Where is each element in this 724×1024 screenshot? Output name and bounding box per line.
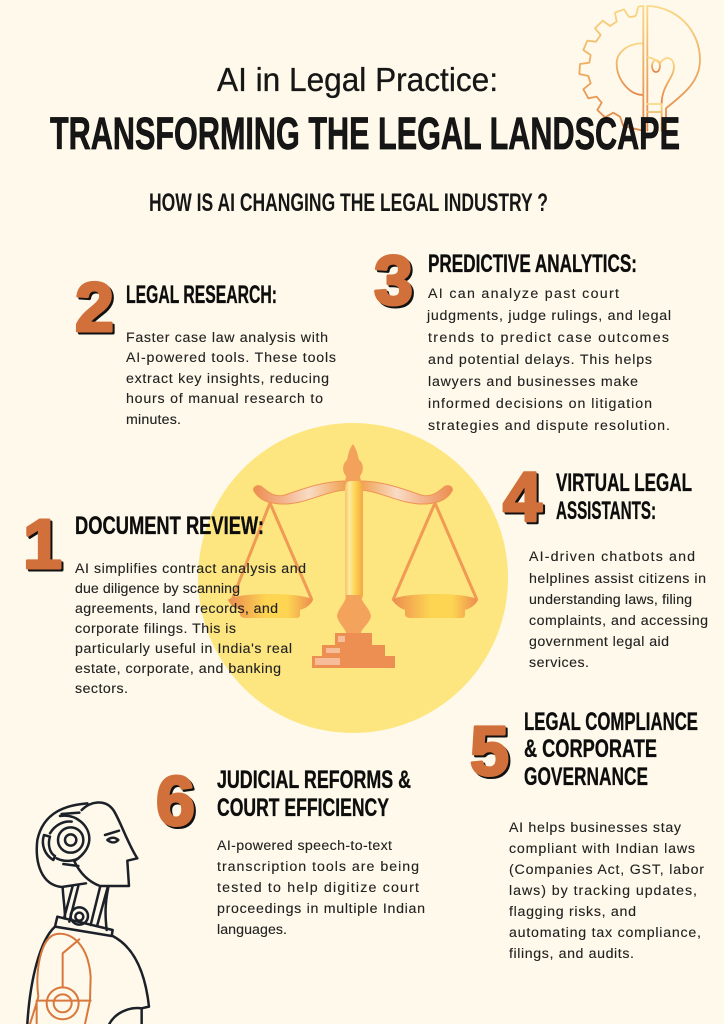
body text: AI-driven chatbots and <box>529 549 695 565</box>
number 5: 5 <box>470 712 509 790</box>
heading: & CORPORATE <box>524 735 657 763</box>
body text: complaints, and accessing <box>529 613 708 629</box>
body text: compliant with Indian laws <box>509 841 695 857</box>
body text: and potential delays. This helps <box>428 352 652 368</box>
body text: due diligence by scanning <box>75 581 240 597</box>
body text: hours of manual research to <box>126 391 323 407</box>
body text: corporate filings. This is <box>75 621 236 637</box>
number 1: 1 <box>23 505 62 583</box>
number 3: 3 <box>374 241 413 319</box>
body text: understanding laws, filing <box>529 592 692 608</box>
body text: AI can analyze past court <box>428 286 619 302</box>
number 2: 2 <box>75 268 114 346</box>
body text: minutes. <box>126 412 181 428</box>
body text <box>529 549 708 671</box>
illustration: balance scale <box>228 444 478 668</box>
body text: Faster case law analysis with <box>126 330 328 346</box>
panel: 6 judicial reforms and court efficiency <box>156 762 425 938</box>
body text: transcription tools are being <box>217 859 419 875</box>
panel: 1 document review <box>23 505 306 697</box>
heading: JUDICIAL REFORMS & <box>217 766 411 794</box>
number 6: 6 <box>156 762 195 840</box>
body text: (Companies Act, GST, labor <box>509 862 704 878</box>
heading: ASSISTANTS: <box>556 497 656 525</box>
body text: extract key insights, reducing <box>126 371 329 387</box>
body text: automating tax compliance, <box>509 925 701 941</box>
number 4: 4 <box>503 458 542 536</box>
title line one: AI in Legal Practice: <box>217 61 498 98</box>
heading <box>217 766 411 822</box>
heading: LEGAL RESEARCH: <box>126 281 277 309</box>
panel: 3 predictive analytics <box>374 241 671 434</box>
body text: proceedings in multiple Indian <box>217 901 425 917</box>
icon: gear and light bulb <box>579 6 700 131</box>
body text: particularly useful in India's real <box>75 641 292 657</box>
body text: estate, corporate, and banking <box>75 661 281 677</box>
heading <box>556 469 692 525</box>
body text: sectors. <box>75 681 128 697</box>
body text: languages. <box>217 922 287 938</box>
panel: 5 legal compliance and corporate governance <box>470 708 704 962</box>
illustration: robot in profile <box>27 802 149 1024</box>
body text: AI-powered speech-to-text <box>217 838 392 854</box>
title <box>50 61 680 159</box>
body text: tested to help digitize court <box>217 880 419 896</box>
heading: PREDICTIVE ANALYTICS: <box>428 250 637 278</box>
body text <box>426 286 671 434</box>
body text <box>75 561 306 697</box>
body text <box>126 330 336 428</box>
heading: GOVERNANCE <box>524 763 648 791</box>
body text: lawyers and businesses make <box>428 374 638 390</box>
heading <box>524 708 698 791</box>
body text: AI-powered tools. These tools <box>126 350 336 366</box>
body text: flagging risks, and <box>509 904 636 920</box>
heading: DOCUMENT REVIEW: <box>75 512 264 540</box>
subheading question: HOW IS AI CHANGING THE LEGAL INDUSTRY ? <box>149 189 548 217</box>
panel: 4 virtual legal assistants <box>503 458 708 671</box>
body text: filings, and audits. <box>509 946 634 962</box>
body text: laws) by tracking updates, <box>509 883 697 899</box>
body text: judgments, judge rulings, and legal <box>426 308 671 324</box>
illustration: central yellow circle <box>198 423 508 733</box>
body text: AI helps businesses stay <box>509 820 682 836</box>
panel: 2 legal research <box>75 268 336 428</box>
heading: COURT EFFICIENCY <box>217 794 389 822</box>
body text: informed decisions on litigation <box>428 396 652 412</box>
body text <box>217 838 425 938</box>
body text: strategies and dispute resolution. <box>428 418 670 434</box>
body text <box>509 820 704 962</box>
body text: AI simplifies contract analysis and <box>75 561 306 577</box>
body text: government legal aid <box>529 634 669 650</box>
body text: trends to predict case outcomes <box>428 330 669 346</box>
body text: agreements, land records, and <box>75 601 278 617</box>
body text: services. <box>529 655 589 671</box>
body text: helplines assist citizens in <box>529 571 706 587</box>
